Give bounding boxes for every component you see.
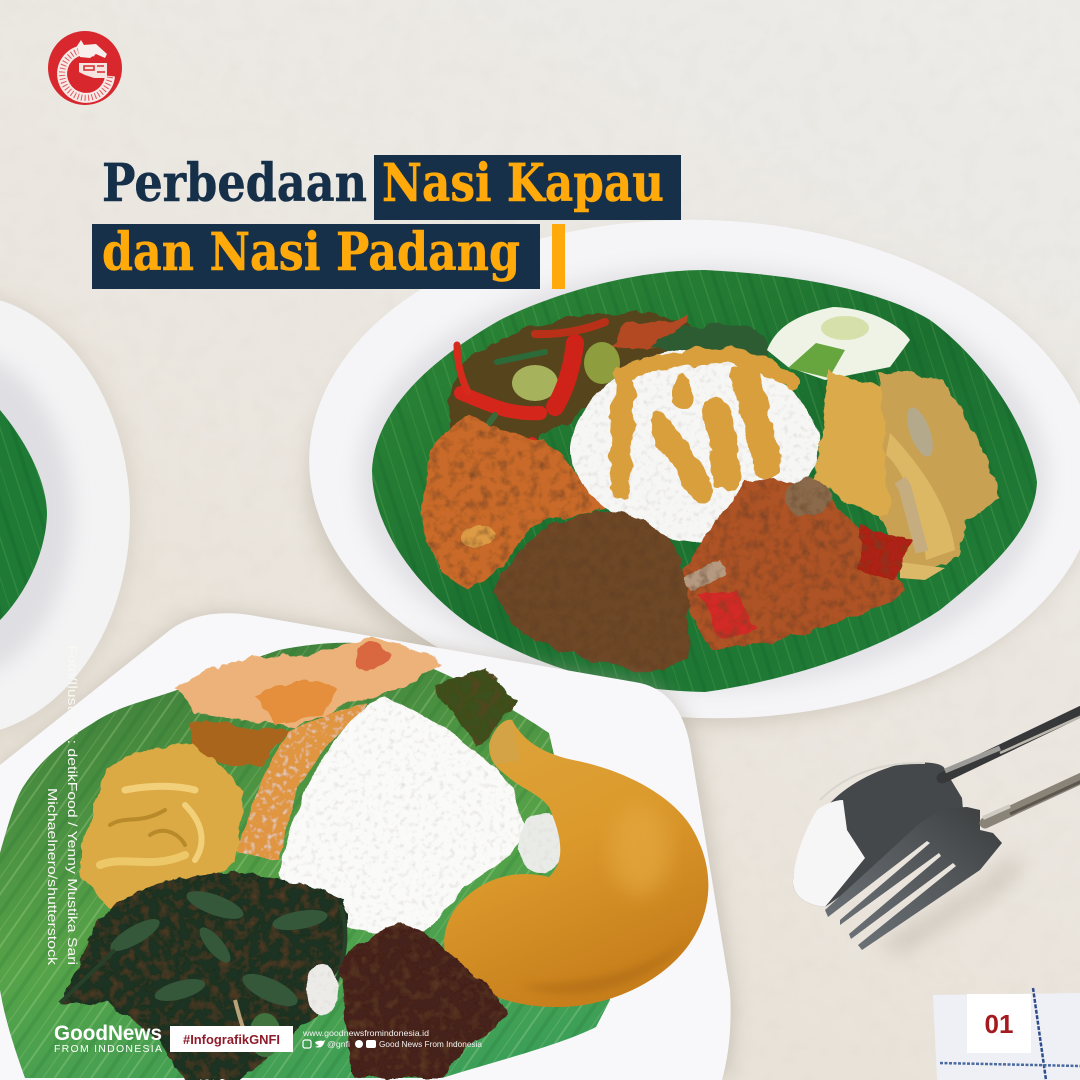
dark rendang	[340, 923, 507, 1078]
banana leaf	[360, 260, 1050, 700]
hashtag tag	[170, 1026, 293, 1052]
GoodNews logotype: GoodNews	[54, 1022, 162, 1045]
credit line 1: Foto/Ilustrasi : detikFood / Yenny Mustika Sari	[65, 645, 80, 965]
GoodNews logotype	[54, 1022, 162, 1055]
website and social: www.goodnewsfromindonesia.id	[302, 1028, 429, 1038]
rice crumbs below greens	[306, 964, 338, 1016]
left cropped plate	[0, 291, 134, 739]
photo credit	[45, 645, 80, 966]
cutlery shadow	[880, 850, 1020, 955]
rice mound	[279, 697, 526, 937]
cassava leaf	[433, 667, 517, 747]
right plate: Nasi Kapau	[301, 206, 1080, 732]
website and social: Good News From Indonesia	[379, 1039, 482, 1049]
title cursor bar	[552, 224, 565, 289]
title box 1	[374, 155, 681, 220]
hashtag tag: #InfografikGNFI	[183, 1033, 280, 1047]
footer brand	[54, 1022, 482, 1055]
seasoned rice edge	[237, 703, 368, 860]
bottom plate: Nasi Padang	[0, 613, 733, 1080]
GoodNews logotype: FROM INDONESIA	[54, 1043, 162, 1055]
title	[92, 153, 681, 289]
credit line 2: Michaelnero/shutterstock	[45, 788, 60, 966]
red chili meat	[677, 480, 910, 650]
white plate	[301, 206, 1080, 732]
napkin	[933, 988, 1080, 1080]
plate shadow	[308, 236, 1080, 724]
title highlight 2: dan Nasi Padang	[102, 222, 520, 283]
title line 1 plain: Perbedaan	[102, 153, 367, 214]
title box 2	[92, 224, 540, 289]
square white plate	[0, 613, 731, 1080]
steamed greens	[60, 873, 345, 1080]
rendang	[494, 510, 689, 671]
gulai tripe	[79, 743, 243, 917]
small rice behind sausage	[519, 813, 565, 873]
banana leaf	[0, 640, 620, 1080]
fork	[825, 778, 1080, 950]
page number	[967, 994, 1031, 1053]
logo: GNFI garuda badge	[48, 31, 122, 105]
cucumber slice	[767, 307, 910, 380]
gulai yellow tripe	[816, 370, 1000, 580]
sambal hijau and red peppers	[445, 312, 770, 470]
website and social	[302, 1028, 482, 1049]
cutlery: spoon and fork	[793, 711, 1080, 955]
gulai sausage	[444, 720, 708, 1007]
page number: 01	[985, 1009, 1013, 1039]
website and social: @gnfi	[327, 1039, 350, 1049]
spoon	[793, 711, 1080, 907]
rice mound with yellow sauce	[571, 350, 820, 543]
peanut sambal	[422, 415, 612, 590]
fried toppings	[177, 637, 442, 767]
plate shadow	[0, 613, 733, 1078]
title highlight 1: Nasi Kapau	[382, 153, 664, 214]
